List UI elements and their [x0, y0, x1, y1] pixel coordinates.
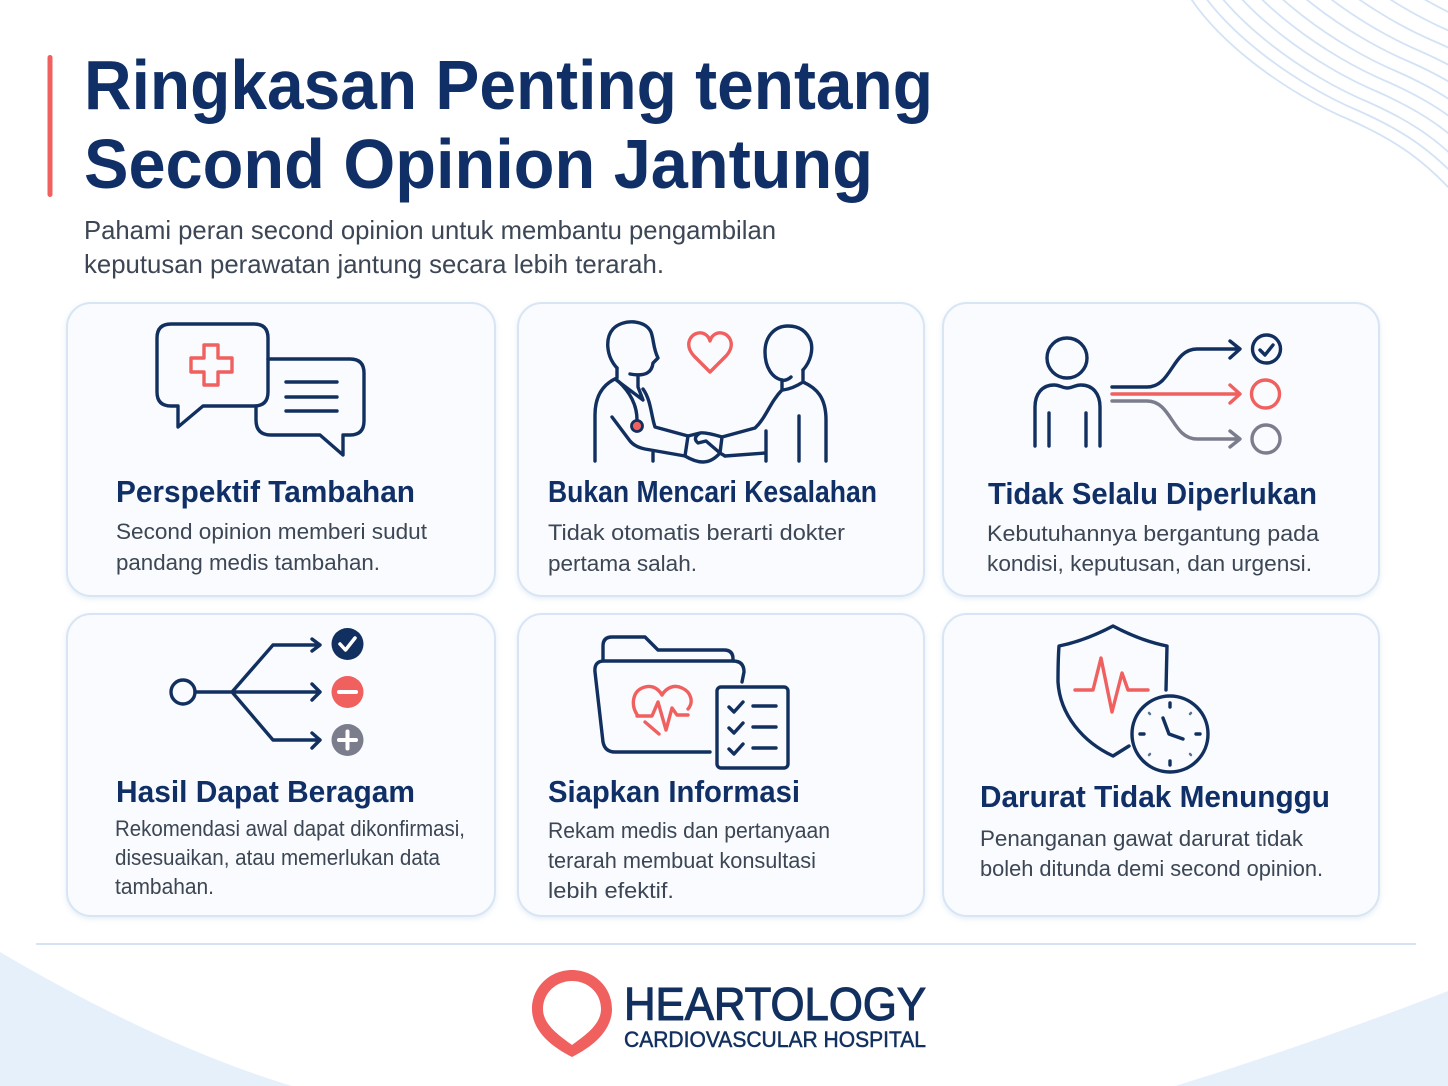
- panel: Tidak Selalu Diperlukan: [943, 303, 1379, 596]
- heading: Darurat Tidak Menunggu: [980, 779, 1330, 814]
- body text: terarah membuat konsultasi: [548, 848, 816, 873]
- logo: Heartology: [532, 970, 926, 1057]
- body text: tambahan.: [115, 874, 214, 899]
- heading: Perspektif Tambahan: [116, 474, 415, 509]
- subtitle: Pahami peran second opinion untuk membantu pengambilan: [84, 215, 776, 245]
- body text: [980, 826, 1323, 881]
- body text: [115, 816, 465, 899]
- icon: branching outcomes: [171, 628, 364, 756]
- footer divider: [36, 943, 1416, 945]
- icon: folder with heart and checklist: [595, 637, 788, 768]
- body text: boleh ditunda demi second opinion.: [980, 856, 1323, 881]
- body text: Rekam medis dan pertanyaan: [548, 818, 830, 843]
- body text: Tidak otomatis berarti dokter: [548, 520, 846, 545]
- body text: pandang medis tambahan.: [116, 550, 380, 575]
- icon: person with three pathways: [1035, 335, 1280, 453]
- panel: Bukan Mencari Kesalahan: [518, 303, 924, 596]
- panel: Siapkan Informasi: [518, 614, 924, 916]
- decorative blob, bottom right: [1175, 991, 1448, 1086]
- subtitle: keputusan perawatan jantung secara lebih terarah.: [84, 249, 664, 279]
- body text: disesuaikan, atau memerlukan data: [115, 845, 440, 870]
- title: [84, 46, 933, 203]
- logo mark: [532, 970, 612, 1057]
- icon: shield with heartbeat and clock: [1058, 626, 1208, 772]
- icon: doctor and patient handshake: [595, 322, 826, 462]
- body text: [548, 520, 846, 576]
- title: Second Opinion Jantung: [84, 125, 873, 203]
- heading: Tidak Selalu Diperlukan: [988, 476, 1317, 511]
- logo wordmark: [624, 978, 926, 1052]
- body text: kondisi, keputusan, dan urgensi.: [987, 551, 1312, 576]
- body text: Second opinion memberi sudut: [116, 519, 428, 544]
- subtitle: [84, 215, 776, 279]
- body text: [116, 519, 428, 575]
- body text: Kebutuhannya bergantung pada: [987, 521, 1319, 546]
- heading: Siapkan Informasi: [548, 774, 800, 809]
- body text: [987, 521, 1319, 576]
- panel: Perspektif Tambahan: [67, 303, 495, 596]
- logo wordmark: CARDIOVASCULAR HOSPITAL: [624, 1027, 926, 1052]
- accent bar: [48, 55, 52, 197]
- panel: Darurat Tidak Menunggu: [943, 614, 1379, 916]
- heading: Hasil Dapat Beragam: [116, 774, 415, 809]
- body text: Rekomendasi awal dapat dikonfirmasi,: [115, 816, 465, 841]
- panel: Hasil Dapat Beragam: [67, 614, 495, 916]
- logo wordmark: HEARTOLOGY: [624, 978, 926, 1030]
- body text: Penanganan gawat darurat tidak: [980, 826, 1304, 851]
- decorative wave lines, top right: [1180, 0, 1448, 200]
- icon: medical chat bubbles: [157, 324, 364, 455]
- body text: lebih efektif.: [548, 878, 674, 903]
- body text: [548, 818, 830, 903]
- body text: pertama salah.: [548, 551, 697, 576]
- decorative blob, bottom left: [0, 952, 292, 1086]
- heading: Bukan Mencari Kesalahan: [548, 474, 877, 509]
- title: Ringkasan Penting tentang: [84, 46, 933, 124]
